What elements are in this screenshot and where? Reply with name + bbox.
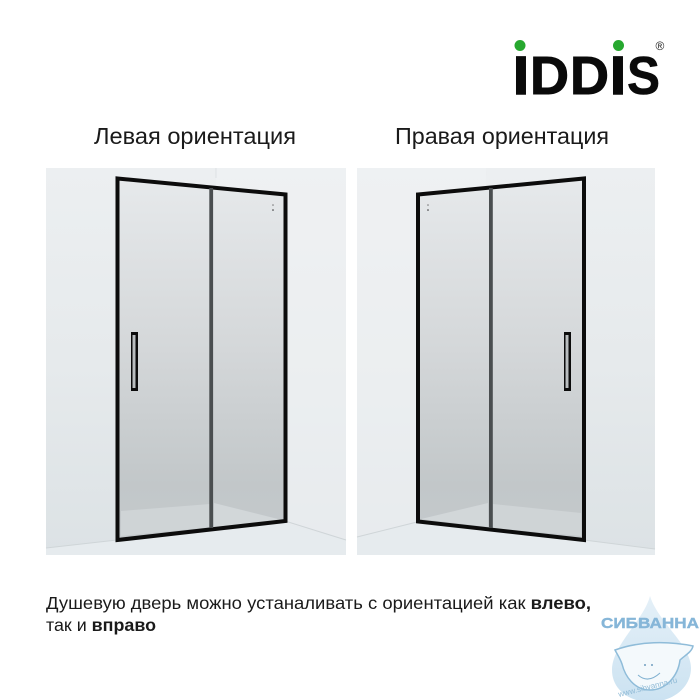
panel: right door photo [357,168,655,555]
floor [46,503,346,555]
logo: IDDIS: D [570,46,609,106]
caption text: так и вправо [46,615,156,635]
logo: IDDIS: D [530,46,569,106]
hinge dots [272,204,274,206]
glass [119,180,284,538]
heading: right orientation: Правая ориентация [395,123,609,149]
logo: IDDIS [513,39,664,106]
logo: IDDIS: I [610,46,626,106]
handle [564,332,571,391]
centre profile [209,188,213,528]
logo: IDDIS: I [513,46,529,106]
hinge dots [427,204,429,206]
watermark: Sibvanna logo: СИБВАННА [601,615,699,632]
door frame [418,178,584,540]
caption text: Душевую дверь можно устаналивать с ориентацией как влево, [46,593,591,613]
glass [419,180,583,538]
door frame [118,178,286,540]
watermark: Sibvanna logo: www.sibvanna.ru [616,676,678,699]
floor [357,503,655,555]
watermark: Sibvanna logo [601,596,699,700]
logo: IDDIS: ® [656,39,664,53]
handle [131,332,138,391]
panel: left door photo [46,168,346,555]
heading: left orientation: Левая ориентация [94,123,296,149]
centre profile [489,188,493,528]
logo: IDDIS: S [627,46,660,106]
caption text [46,593,591,635]
